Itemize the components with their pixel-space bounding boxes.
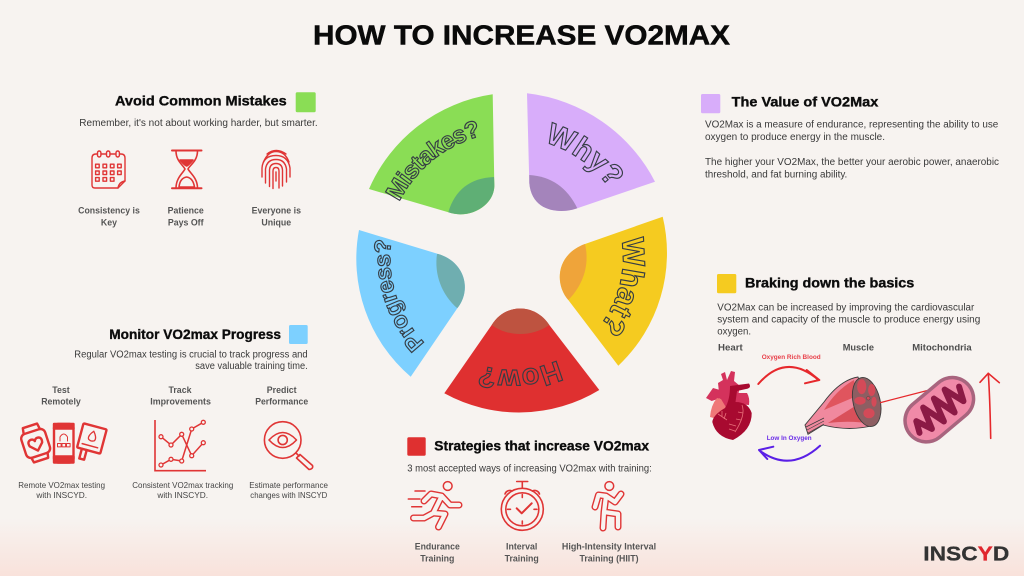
caption: consistent tracking bbox=[132, 480, 234, 500]
body text: benefits: threshold, and fat burning ability. bbox=[705, 169, 847, 180]
label: low in oxygen: Low In Oxygen bbox=[767, 435, 812, 442]
wheel segment: Why bbox=[527, 93, 655, 211]
icon label: patience: Patience bbox=[168, 205, 204, 215]
heading: basics: Braking down the basics bbox=[745, 275, 915, 291]
body text: definition bbox=[705, 120, 999, 143]
icon: magnifier with eye bbox=[264, 422, 313, 470]
icon label: consistency: Consistency is bbox=[78, 205, 140, 215]
label: predict performance: Performance bbox=[255, 397, 308, 407]
label: test remotely bbox=[41, 385, 81, 407]
arrow: low in oxygen bbox=[759, 446, 820, 461]
caption: estimate performance bbox=[249, 480, 328, 500]
caption: remote testing bbox=[18, 480, 105, 500]
label: endurance training bbox=[415, 541, 460, 563]
label: muscle: Muscle bbox=[843, 343, 874, 354]
panel: avoid common mistakes bbox=[78, 92, 318, 227]
icon: high-intensity person bbox=[595, 482, 621, 528]
icon: muscle bbox=[805, 375, 885, 434]
label: HIIT: High-Intensity Interval bbox=[562, 541, 656, 551]
label: track improvements: Improvements bbox=[150, 397, 211, 407]
heading: value: The Value of VO2Max bbox=[732, 94, 879, 110]
wheel segment: Why: Why? bbox=[548, 122, 623, 183]
arrow: oxygen rich blood bbox=[758, 367, 819, 384]
body text: basics: system and capacity of the muscle to produce energy using bbox=[717, 314, 980, 325]
colour key: green bbox=[296, 92, 316, 112]
arrow: increase bbox=[980, 373, 999, 438]
label: predict performance: Predict bbox=[267, 385, 297, 395]
icon: heart bbox=[706, 371, 752, 440]
caption: estimate performance: Estimate performance bbox=[249, 480, 328, 490]
icon label: consistency bbox=[78, 205, 140, 227]
icon label: unique: Unique bbox=[261, 217, 291, 227]
wheel segment: Mistakes: Mistakes? bbox=[384, 120, 478, 202]
label: HIIT: Training (HIIT) bbox=[580, 553, 639, 563]
heading: strategies: Strategies that increase VO2max bbox=[434, 438, 649, 454]
colour key: red bbox=[407, 437, 426, 456]
intro text: save valuable training time. bbox=[195, 361, 308, 372]
icon label: patience: Pays Off bbox=[168, 217, 204, 227]
colour key: purple bbox=[701, 94, 720, 113]
label: test remotely: Remotely bbox=[41, 397, 81, 407]
body text: basics bbox=[717, 302, 980, 337]
icon: wearable, phone and test device bbox=[18, 422, 107, 464]
icon label: consistency: Key bbox=[101, 217, 117, 227]
body text: basics: oxygen. bbox=[717, 326, 751, 337]
panel: basics bbox=[706, 274, 999, 461]
label: test remotely: Test bbox=[52, 385, 70, 395]
label: track improvements: Track bbox=[168, 385, 192, 395]
wheel segment: How bbox=[444, 308, 600, 412]
caption: consistent tracking: Consistent VO2max tracking bbox=[132, 480, 234, 490]
icon: calendar bbox=[92, 151, 125, 188]
icon: hourglass bbox=[172, 150, 202, 188]
label: heart: Heart bbox=[718, 343, 744, 354]
intro text bbox=[74, 349, 308, 372]
icon label: patience bbox=[168, 205, 204, 227]
label: predict performance bbox=[255, 385, 308, 407]
icon label: unique: Everyone is bbox=[252, 205, 301, 215]
icon: runner bbox=[408, 482, 459, 527]
wheel segment: What bbox=[560, 216, 667, 366]
colour key: blue bbox=[289, 325, 308, 344]
label: interval training: Interval bbox=[506, 541, 537, 551]
caption: remote testing: Remote VO2max testing bbox=[18, 480, 105, 490]
label: oxygen rich blood: Oxygen Rich Blood bbox=[762, 354, 821, 361]
label: interval training bbox=[505, 541, 539, 563]
label: HIIT bbox=[562, 541, 656, 563]
panel: value of VO2Max bbox=[701, 94, 999, 180]
icon: fingerprint bbox=[262, 150, 290, 188]
panel: strategies bbox=[407, 437, 656, 563]
icon label: unique bbox=[252, 205, 301, 227]
wheel segment: Progress: Progress? bbox=[374, 240, 424, 354]
body text: benefits: The higher your VO2Max, the better your aerobic power, anaerobic bbox=[705, 157, 999, 168]
central wheel diagram bbox=[356, 93, 667, 412]
heading: monitor progress: Monitor VO2max Progress bbox=[109, 326, 281, 342]
logo: INSCYD: INSC YD bbox=[923, 542, 1009, 566]
label: interval training: Training bbox=[505, 553, 539, 563]
panel: monitor progress bbox=[18, 325, 328, 500]
caption: estimate performance: changes with INSCYD bbox=[250, 490, 327, 500]
label: endurance training: Training bbox=[420, 553, 454, 563]
caption: consistent tracking: with INSCYD. bbox=[156, 490, 208, 500]
intro text: Regular VO2max testing is crucial to track progress and bbox=[74, 349, 308, 360]
title: HOW TO INCREASE VO2MAX bbox=[313, 20, 730, 50]
wheel segment: Progress bbox=[356, 230, 465, 377]
body text: basics: VO2Max can be increased by improving the cardiovascular bbox=[717, 302, 975, 313]
colour key: yellow bbox=[717, 274, 736, 293]
body text: definition: VO2Max is a measure of endurance, representing the ability to use bbox=[705, 120, 999, 131]
body text: definition: oxygen to produce energy in the muscle. bbox=[705, 132, 885, 143]
heading: avoid common mistakes: Avoid Common Mistakes bbox=[115, 93, 287, 109]
icon: line chart bbox=[155, 420, 206, 471]
label: track improvements bbox=[150, 385, 211, 407]
body text: benefits bbox=[705, 157, 999, 180]
intro text: 3 most accepted ways of increasing VO2max with training: bbox=[407, 464, 652, 475]
wheel segment: What: What? bbox=[602, 236, 646, 336]
label: mitochondria: Mitochondria bbox=[912, 343, 972, 354]
label: endurance training: Endurance bbox=[415, 541, 460, 551]
icon: stopwatch bbox=[501, 482, 543, 530]
caption: remote testing: with INSCYD. bbox=[35, 490, 87, 500]
icon: mitochondrion bbox=[894, 366, 985, 453]
connector line: muscle to mitochondrion bbox=[880, 387, 940, 403]
intro text: Remember, it's not about working harder, but smarter. bbox=[79, 118, 318, 129]
wheel segment: How: How? bbox=[478, 360, 564, 388]
wheel segment: Mistakes bbox=[369, 94, 494, 214]
